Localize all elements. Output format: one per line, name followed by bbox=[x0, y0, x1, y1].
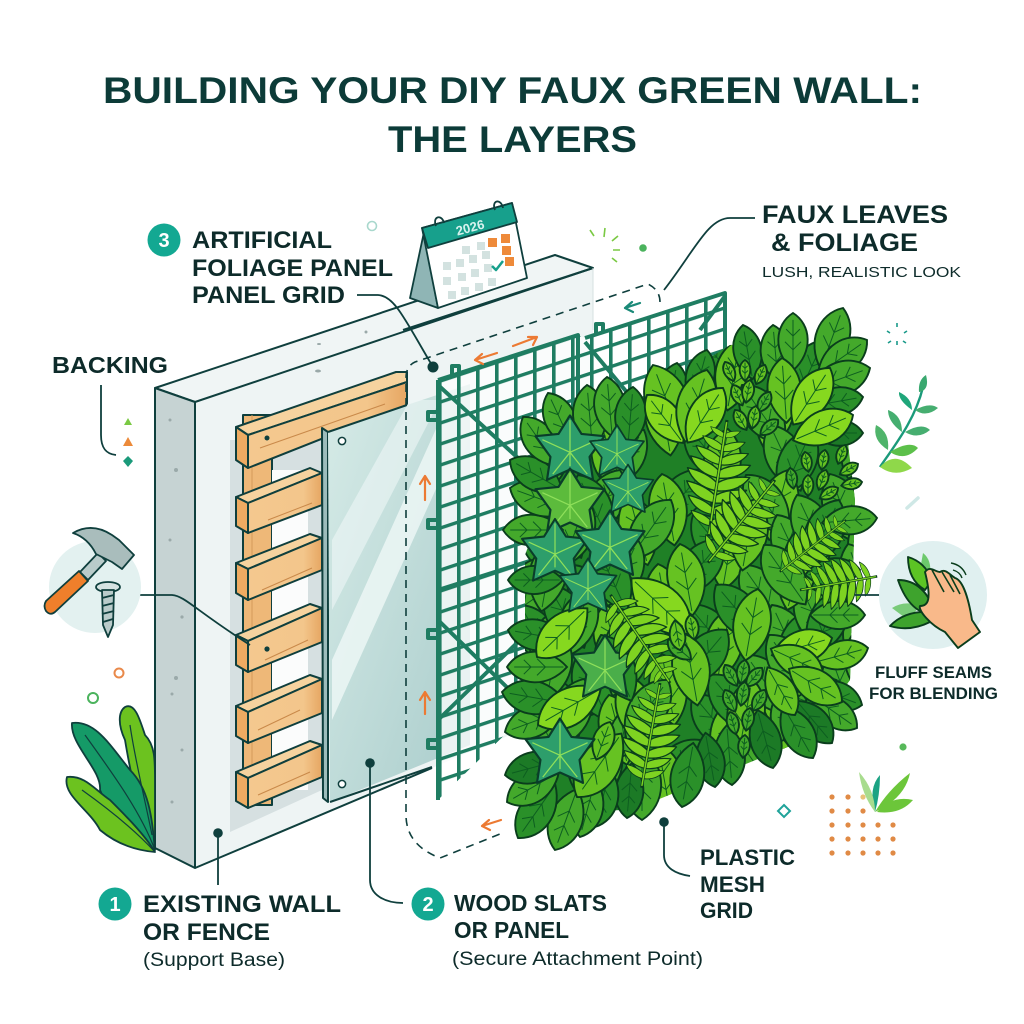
icon: hand fluffing leaves bbox=[879, 541, 987, 649]
ivy leaves bbox=[522, 416, 654, 783]
label: wood slats or panel: 2 bbox=[422, 894, 434, 916]
label: existing wall or fence: OR FENCE bbox=[143, 919, 270, 946]
label: artificial foliage panel: 3 bbox=[158, 230, 170, 252]
label: fluff seams: FLUFF SEAMS bbox=[875, 663, 992, 682]
background leaf rows bbox=[525, 342, 855, 799]
label: fluff seams bbox=[869, 663, 998, 703]
title bbox=[103, 70, 922, 160]
icon: bottom right sprig bbox=[859, 772, 913, 812]
plastic mesh grid bbox=[428, 293, 725, 800]
dashed installation outline bbox=[406, 284, 660, 858]
label: plastic mesh grid: MESH bbox=[700, 872, 765, 897]
icon: right sprig bbox=[875, 375, 938, 473]
label: plastic mesh grid bbox=[700, 845, 795, 923]
label: existing wall or fence: 1 bbox=[109, 894, 121, 916]
label: artificial foliage panel: ARTIFICIAL bbox=[192, 227, 332, 254]
label: existing wall or fence bbox=[98, 888, 341, 971]
wood slats bbox=[230, 372, 407, 832]
leader lines bbox=[101, 218, 882, 903]
label: wood slats or panel: OR PANEL bbox=[454, 917, 569, 943]
title: THE LAYERS bbox=[388, 119, 637, 160]
label: wood slats or panel: WOOD SLATS bbox=[454, 890, 607, 916]
decorative dot grid bbox=[829, 794, 896, 856]
ferns bbox=[587, 415, 882, 793]
label: plastic mesh grid: PLASTIC bbox=[700, 845, 795, 870]
label: wood slats or panel: (Secure Attachment Point) bbox=[452, 949, 703, 970]
small accents bbox=[88, 222, 918, 817]
title: BUILDING YOUR DIY FAUX GREEN WALL: bbox=[103, 70, 922, 111]
label: artificial foliage panel bbox=[148, 224, 393, 309]
label: faux leaves and foliage: FAUX LEAVES bbox=[762, 201, 948, 229]
icon: hammer and screw bbox=[44, 528, 141, 637]
bright feature leaves bbox=[525, 357, 859, 808]
label: existing wall or fence: (Support Base) bbox=[143, 950, 285, 971]
calendar icon: 2026 bbox=[454, 216, 486, 238]
label: faux leaves and foliage: & FOLIAGE bbox=[771, 229, 918, 257]
existing wall bbox=[155, 255, 593, 868]
label: wood slats or panel bbox=[412, 888, 703, 970]
label: existing wall or fence: EXISTING WALL bbox=[143, 891, 341, 918]
label: faux leaves and foliage bbox=[762, 201, 961, 281]
calendar icon bbox=[410, 201, 527, 308]
label: faux leaves and foliage: LUSH, REALISTIC LOOK bbox=[762, 264, 961, 281]
small leaf clusters bbox=[663, 360, 863, 758]
glass panel bbox=[322, 384, 470, 802]
label: artificial foliage panel: FOLIAGE PANEL bbox=[192, 255, 393, 282]
label: artificial foliage panel: PANEL GRID bbox=[192, 282, 345, 309]
label: plastic mesh grid: GRID bbox=[700, 898, 753, 923]
foliage bbox=[500, 307, 878, 851]
label: fluff seams: FOR BLENDING bbox=[869, 684, 998, 703]
direction arrows bbox=[420, 302, 640, 830]
outer ring of leaves bbox=[499, 302, 878, 856]
label: backing: BACKING bbox=[52, 352, 168, 378]
icon: corner plant bbox=[66, 706, 155, 852]
